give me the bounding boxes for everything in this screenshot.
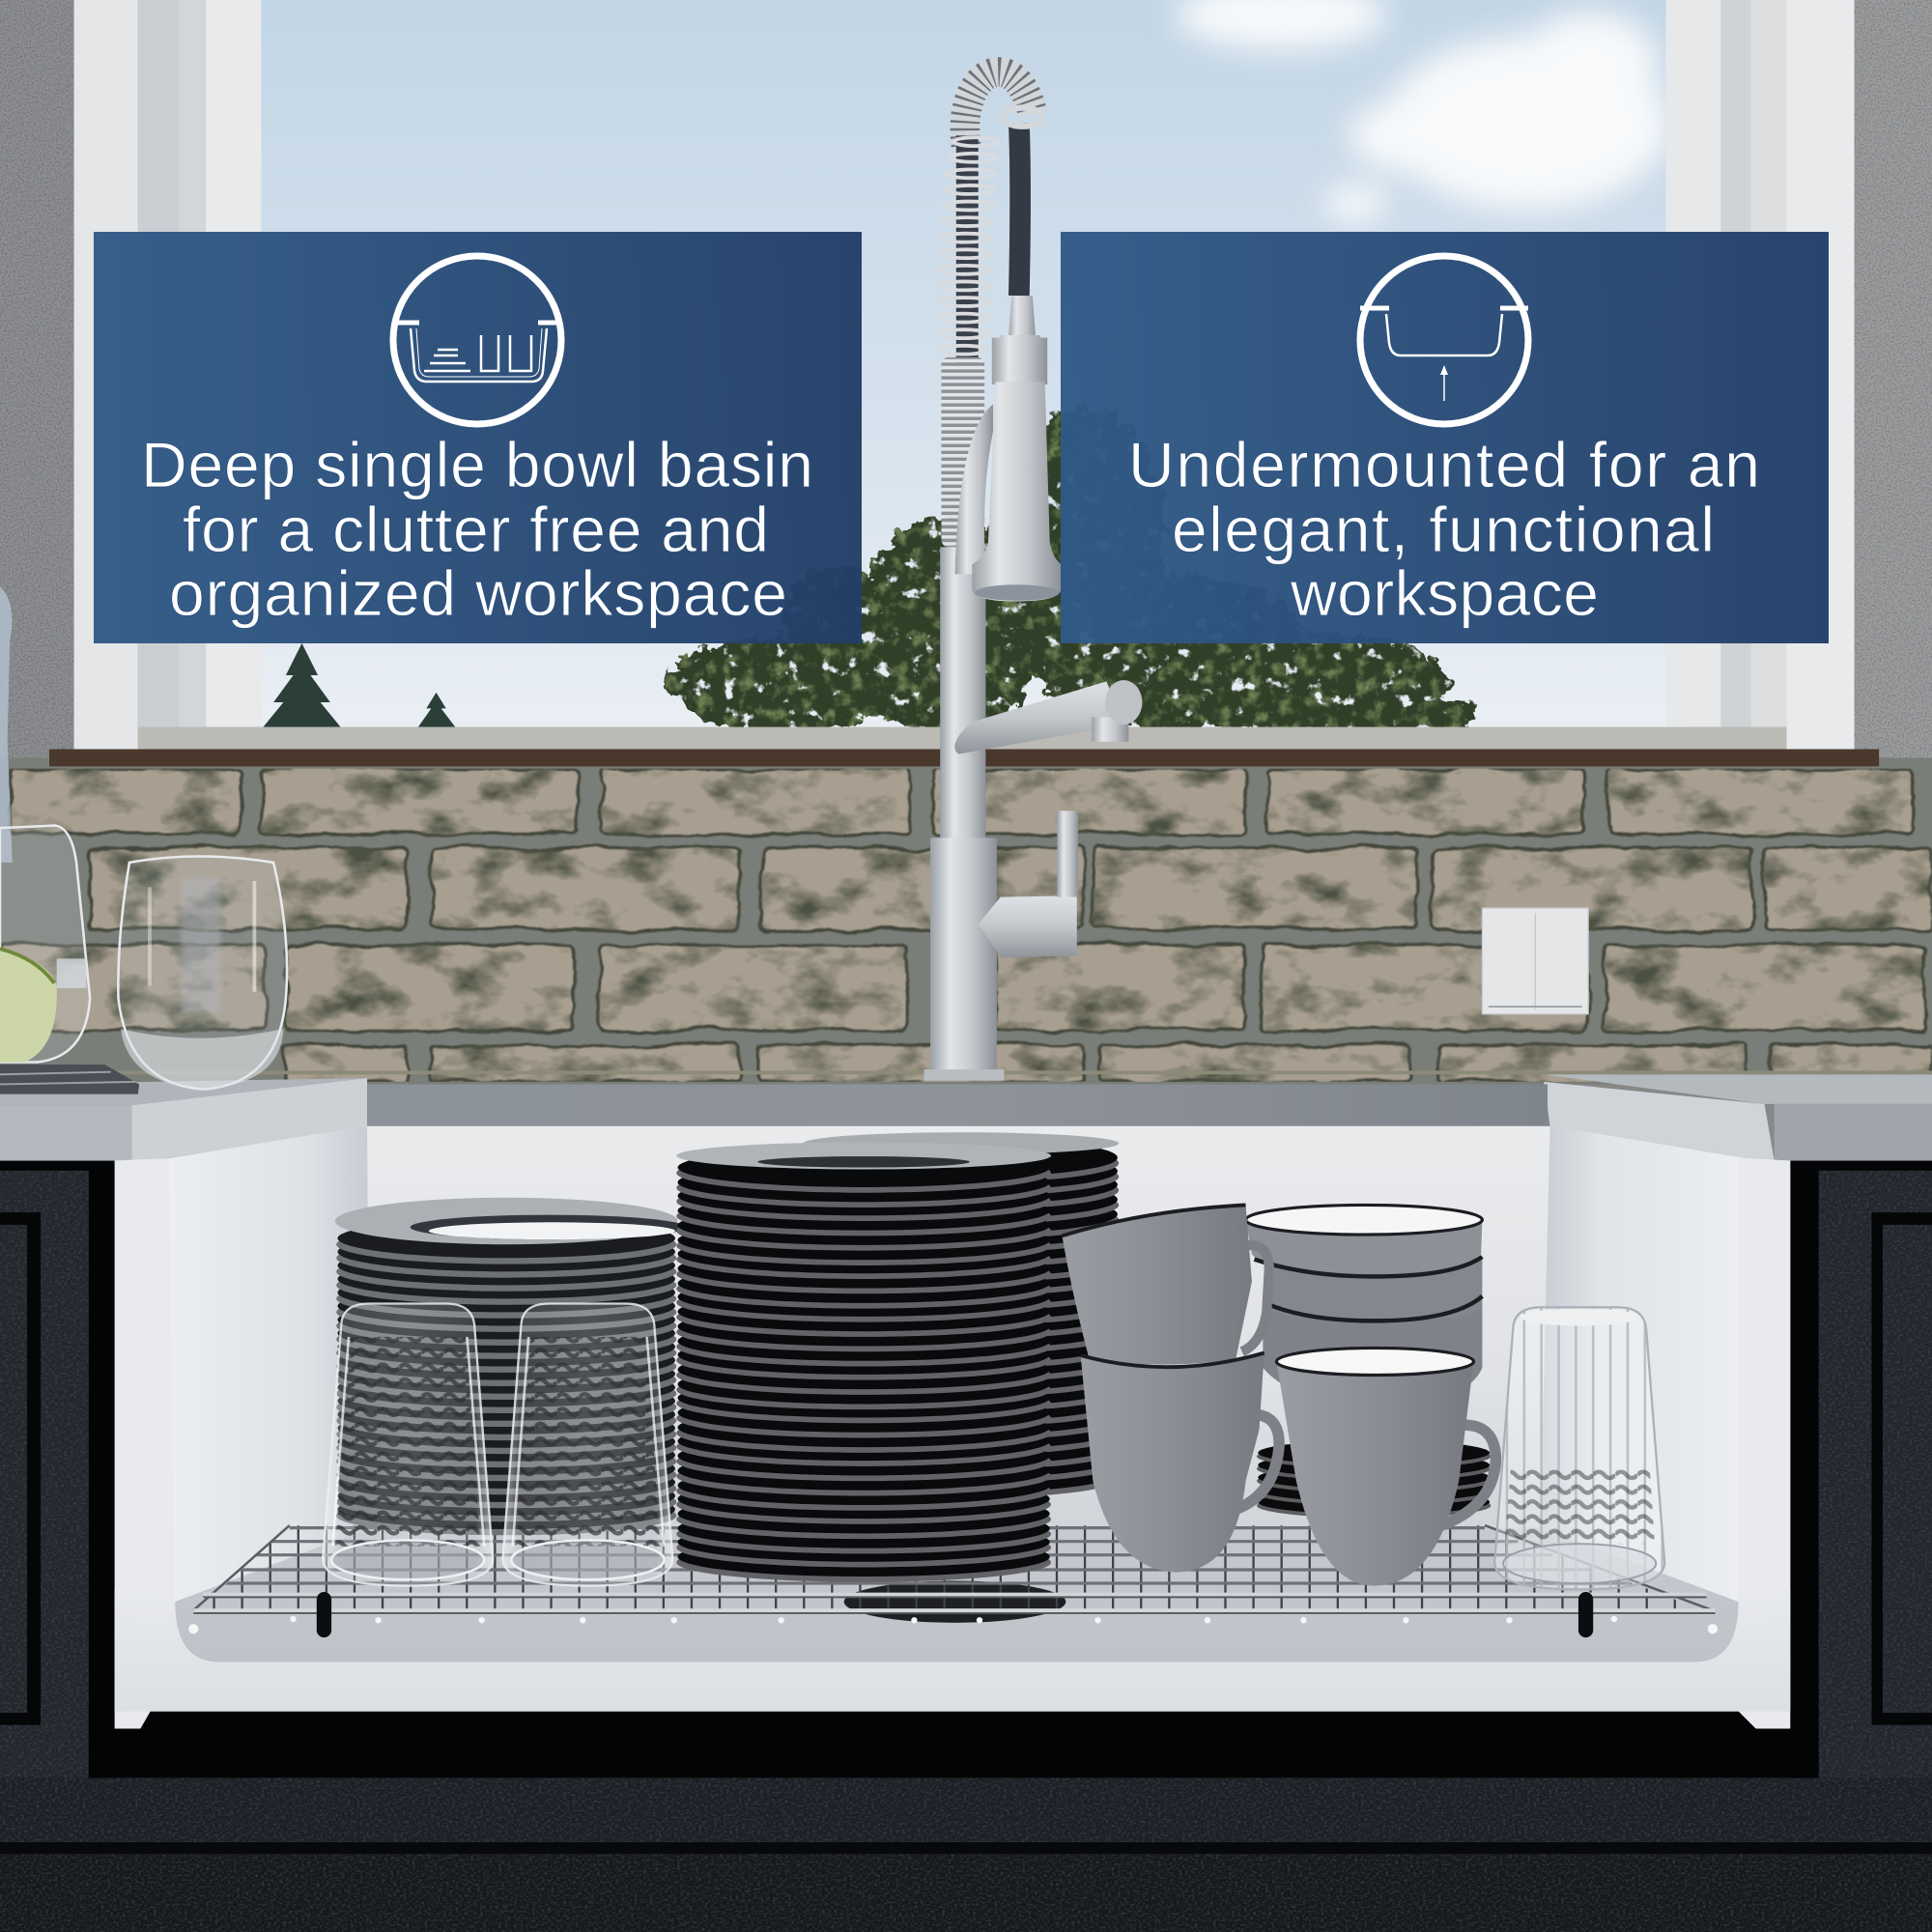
cabinet shadow under sink bbox=[89, 1707, 1819, 1778]
heading: undermounted bbox=[1128, 429, 1760, 629]
glass with lime bbox=[0, 826, 90, 1062]
spray neck bbox=[1008, 296, 1037, 345]
side spout bbox=[954, 681, 1123, 754]
toe kick top band bbox=[0, 1778, 1932, 1842]
heading: undermounted: Undermounted for an bbox=[1128, 429, 1760, 500]
front lip bbox=[115, 1589, 1790, 1712]
drinking glass two bbox=[502, 1303, 672, 1586]
bricks bbox=[0, 769, 1932, 1082]
spring top arc bbox=[965, 71, 1042, 146]
right countertop bbox=[1544, 1074, 1932, 1161]
wooden sill bbox=[49, 750, 1879, 766]
rack feet bbox=[324, 1600, 1586, 1630]
left wall bbox=[169, 1126, 370, 1627]
spring coils bbox=[939, 137, 998, 355]
brick wall bbox=[0, 757, 1932, 1084]
spout aerator bbox=[1092, 717, 1128, 742]
heading: undermounted: elegant, functional bbox=[1172, 494, 1715, 565]
sink floor bbox=[175, 1528, 1739, 1662]
backsplash base line bbox=[0, 1070, 1932, 1074]
base plate bbox=[924, 1069, 1005, 1081]
drain bbox=[844, 1580, 1065, 1623]
window frame left bbox=[74, 0, 261, 752]
left countertop bbox=[0, 1078, 367, 1161]
dish towel bbox=[0, 1065, 139, 1094]
handle lever bbox=[1057, 810, 1078, 897]
cabinet left bbox=[0, 1161, 116, 1780]
handle arm bbox=[979, 895, 1077, 957]
cabinet right bbox=[1790, 1161, 1932, 1780]
spray collar bbox=[992, 335, 1047, 384]
rack side rails bbox=[193, 1525, 1713, 1610]
front rails bbox=[193, 1595, 1716, 1613]
heading: deep single bowl basin bbox=[141, 429, 813, 629]
rack grid bbox=[185, 1528, 1725, 1583]
right wall bbox=[1540, 1126, 1739, 1627]
farmhouse sink bbox=[115, 1126, 1790, 1729]
small conifer left bbox=[261, 643, 343, 729]
toe kick bottom band bbox=[0, 1855, 1932, 1932]
clouds bbox=[1177, 0, 1669, 222]
inner dark hose bbox=[956, 135, 979, 363]
stemless wine glass bbox=[118, 856, 287, 1090]
spout cap bbox=[1105, 680, 1142, 724]
tight spring bbox=[941, 357, 984, 547]
back plate stack bbox=[804, 1132, 1119, 1498]
wall switch bbox=[1482, 908, 1588, 1014]
window sky bbox=[246, 0, 1688, 739]
large tree bbox=[666, 407, 1479, 742]
faucet bbox=[924, 71, 1142, 1081]
background trees bbox=[261, 407, 1479, 742]
icon: undermount arrow bbox=[1360, 256, 1528, 424]
window frame right bbox=[1665, 0, 1855, 752]
toe kick shadow bbox=[0, 1842, 1932, 1855]
heading: undermounted: workspace bbox=[1290, 557, 1599, 629]
left plate stack bbox=[335, 1198, 686, 1535]
heading: deep single bowl basin: for a clutter free and bbox=[183, 494, 769, 565]
bowls bbox=[1246, 1205, 1482, 1405]
upper column bbox=[940, 547, 985, 842]
middle plate stack bbox=[676, 1142, 1051, 1582]
window bottom ledge bbox=[138, 727, 1786, 750]
dish rack bbox=[185, 1525, 1725, 1634]
mug lower left bbox=[1081, 1353, 1279, 1573]
sink outer body bbox=[115, 1126, 1790, 1729]
plates behind mugs bbox=[1257, 1440, 1491, 1518]
small conifer right bbox=[416, 693, 457, 729]
drinking glass three bbox=[1494, 1307, 1664, 1589]
sink cut slab bbox=[367, 1084, 1548, 1126]
faucet base bbox=[930, 838, 997, 1072]
heading: deep single bowl basin: organized workspace bbox=[169, 557, 787, 629]
hose bbox=[1019, 124, 1020, 296]
holder arm bbox=[955, 404, 993, 574]
heading: deep single bowl basin: Deep single bowl basin bbox=[141, 429, 813, 500]
wall left bbox=[0, 0, 74, 757]
rack pegs bbox=[188, 1616, 1718, 1634]
back wall bbox=[365, 1126, 1550, 1545]
mug upper bbox=[1062, 1205, 1269, 1365]
panel background bbox=[94, 232, 862, 643]
panel: deep single bowl basin bbox=[94, 232, 862, 643]
mortar bbox=[0, 757, 1932, 1084]
drinking glass one bbox=[323, 1303, 493, 1586]
pitcher edge bbox=[0, 586, 13, 863]
panel background bbox=[1061, 232, 1829, 643]
spray head body bbox=[972, 382, 1061, 601]
mug lower right bbox=[1276, 1348, 1495, 1586]
icon: basin with dishes bbox=[393, 256, 561, 424]
wall right bbox=[1855, 0, 1932, 757]
aerator face bbox=[975, 584, 1059, 601]
panel: undermounted bbox=[1061, 232, 1829, 643]
